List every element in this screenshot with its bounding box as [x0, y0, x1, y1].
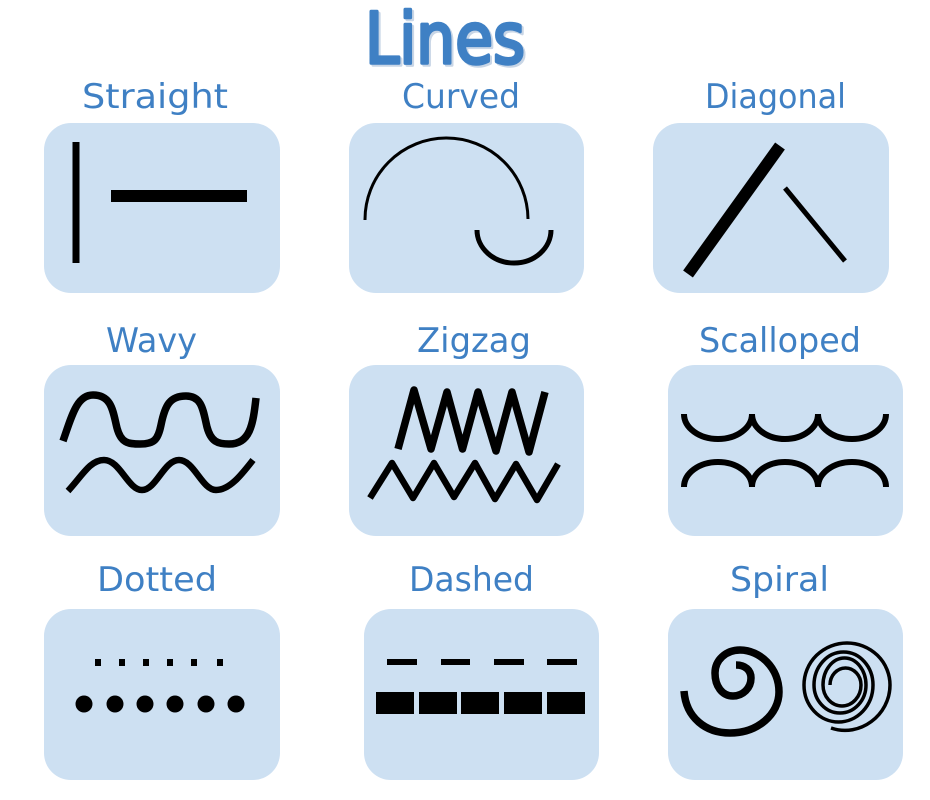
icon: diagonal lines	[688, 146, 845, 274]
heading: Spiral: Spiral	[730, 560, 829, 600]
panel: scalloped	[668, 321, 903, 536]
panel: curved	[349, 77, 584, 293]
panel background	[364, 609, 599, 780]
icon: straight lines	[76, 142, 247, 263]
heading: Curved: Curved	[402, 77, 520, 117]
icon: dotted lines	[76, 659, 244, 712]
panel: spiral	[668, 560, 903, 780]
panel background	[44, 123, 280, 293]
heading: Wavy: Wavy	[106, 321, 197, 361]
heading: Scalloped: Scalloped	[699, 321, 861, 361]
icon: dashed lines	[376, 659, 585, 714]
panel background	[668, 609, 903, 780]
icon: spiral lines	[684, 643, 890, 733]
icon: scalloped lines	[684, 414, 886, 487]
panel background	[44, 365, 280, 536]
panel: zigzag	[349, 321, 584, 536]
title: Lines	[367, 0, 527, 82]
heading: Straight: Straight	[82, 77, 228, 117]
panel: dotted	[44, 560, 280, 780]
heading: Dotted: Dotted	[97, 560, 217, 600]
panel background	[668, 365, 903, 536]
panel: straight	[44, 77, 280, 293]
title: Lines	[365, 0, 525, 80]
heading: Zigzag: Zigzag	[417, 321, 531, 361]
panel background	[44, 609, 280, 780]
icon: curved lines	[365, 138, 551, 263]
icon: zigzag lines	[370, 390, 558, 500]
panel: dashed	[364, 560, 599, 780]
panel: diagonal	[653, 77, 889, 293]
heading: Diagonal: Diagonal	[705, 77, 846, 117]
panel background	[349, 123, 584, 293]
panel background	[653, 123, 889, 293]
panel: wavy	[44, 321, 280, 536]
panel background	[349, 365, 584, 536]
heading: Dashed: Dashed	[409, 560, 534, 600]
icon: wavy lines	[63, 395, 256, 491]
